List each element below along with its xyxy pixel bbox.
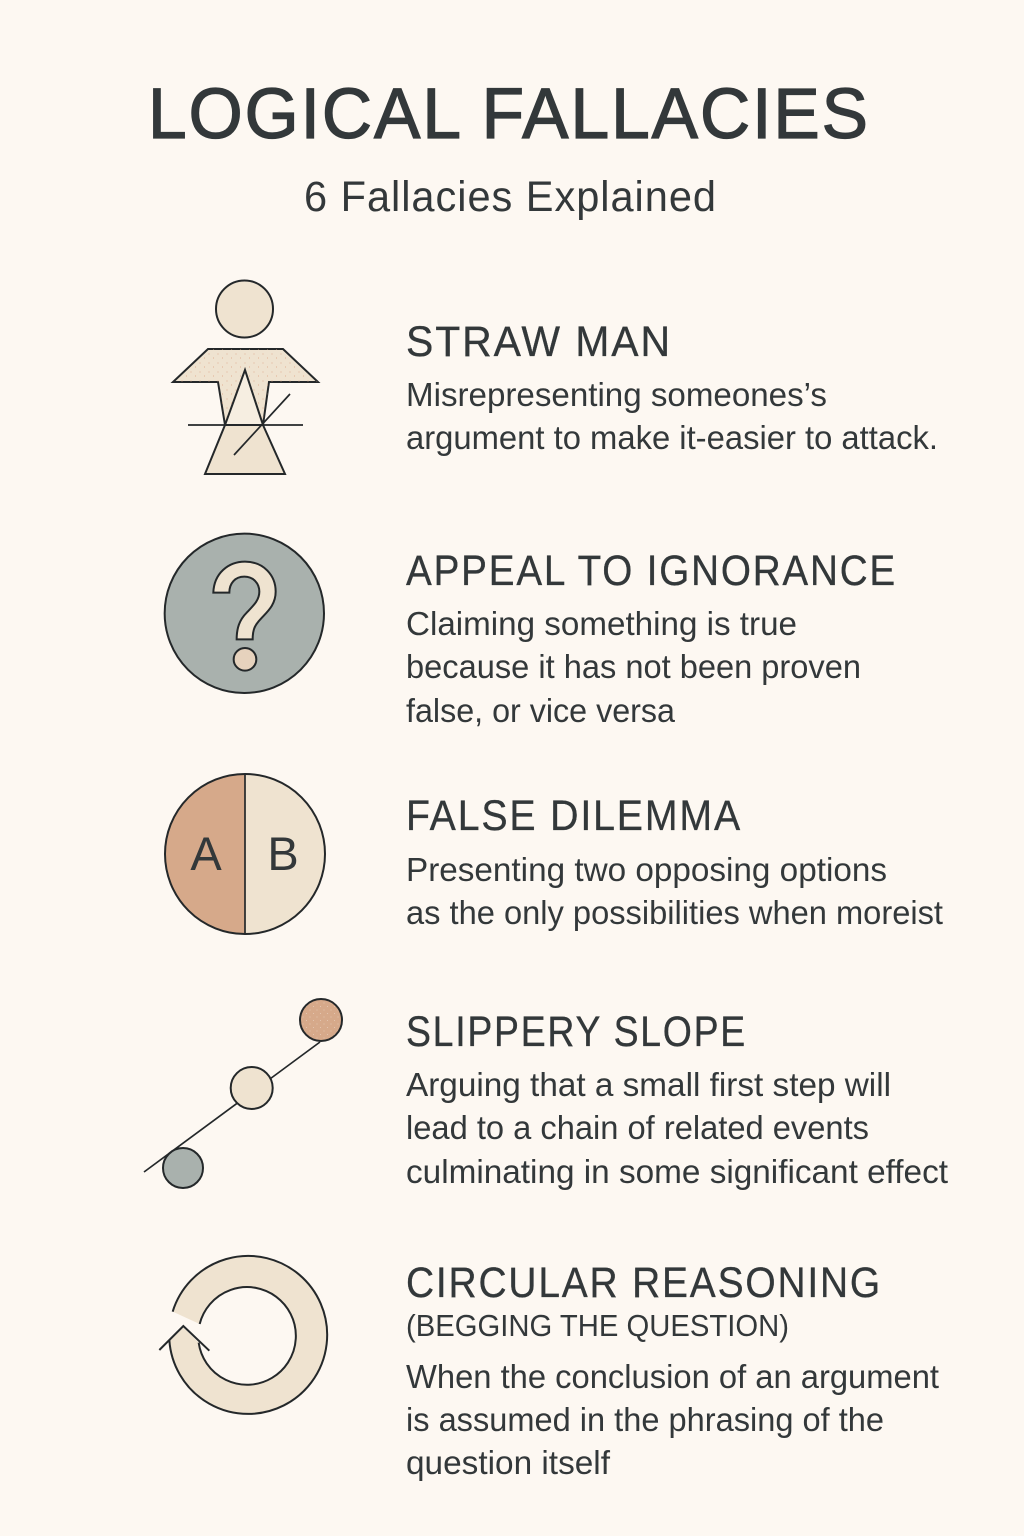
description: false dilemma: as the only possibilities when moreist — [406, 894, 943, 931]
description: false dilemma — [406, 851, 943, 931]
description: slippery slope: culminating in some significant effect — [406, 1153, 948, 1190]
description: straw man — [406, 376, 938, 456]
icon: circular arrow — [159, 1256, 327, 1414]
description: appeal to ignorance: false, or vice versa — [406, 692, 676, 729]
description: false dilemma: Presenting two opposing options — [406, 851, 887, 888]
title: LOGICAL FALLACIES — [148, 75, 870, 154]
heading: slippery slope: SLIPPERY SLOPE — [406, 1008, 747, 1056]
description: circular reasoning: is assumed in the phrasing of the — [406, 1401, 884, 1438]
description: appeal to ignorance: because it has not been proven — [406, 648, 861, 685]
icon: straw man — [173, 280, 318, 474]
description: circular reasoning — [406, 1358, 939, 1481]
heading: straw man: STRAW MAN — [406, 318, 672, 366]
icon: false dilemma circle — [165, 774, 325, 934]
subtitle: 6 Fallacies Explained — [304, 173, 717, 221]
description: straw man: Misrepresenting someones’s — [406, 376, 827, 413]
icon: question mark circle — [165, 534, 324, 693]
description: appeal to ignorance: Claiming something is true — [406, 605, 797, 642]
icon: false dilemma circle: B — [267, 827, 299, 880]
description: circular reasoning: When the conclusion of an argument — [406, 1358, 939, 1395]
description: circular reasoning: question itself — [406, 1444, 611, 1481]
description: slippery slope: lead to a chain of related events — [406, 1109, 869, 1146]
description: appeal to ignorance — [406, 605, 861, 729]
description: slippery slope — [406, 1066, 948, 1190]
description: slippery slope: Arguing that a small first step will — [406, 1066, 891, 1103]
heading: circular reasoning: CIRCULAR REASONING — [406, 1259, 882, 1307]
icon: false dilemma circle: A — [190, 827, 222, 880]
heading: false dilemma: FALSE DILEMMA — [406, 792, 742, 840]
subheading: begging the question: (BEGGING THE QUESTION) — [406, 1308, 789, 1343]
heading: appeal to ignorance: APPEAL TO IGNORANCE — [406, 547, 897, 595]
icon: slippery slope — [144, 999, 342, 1188]
description: straw man: argument to make it-easier to attack. — [406, 419, 938, 456]
